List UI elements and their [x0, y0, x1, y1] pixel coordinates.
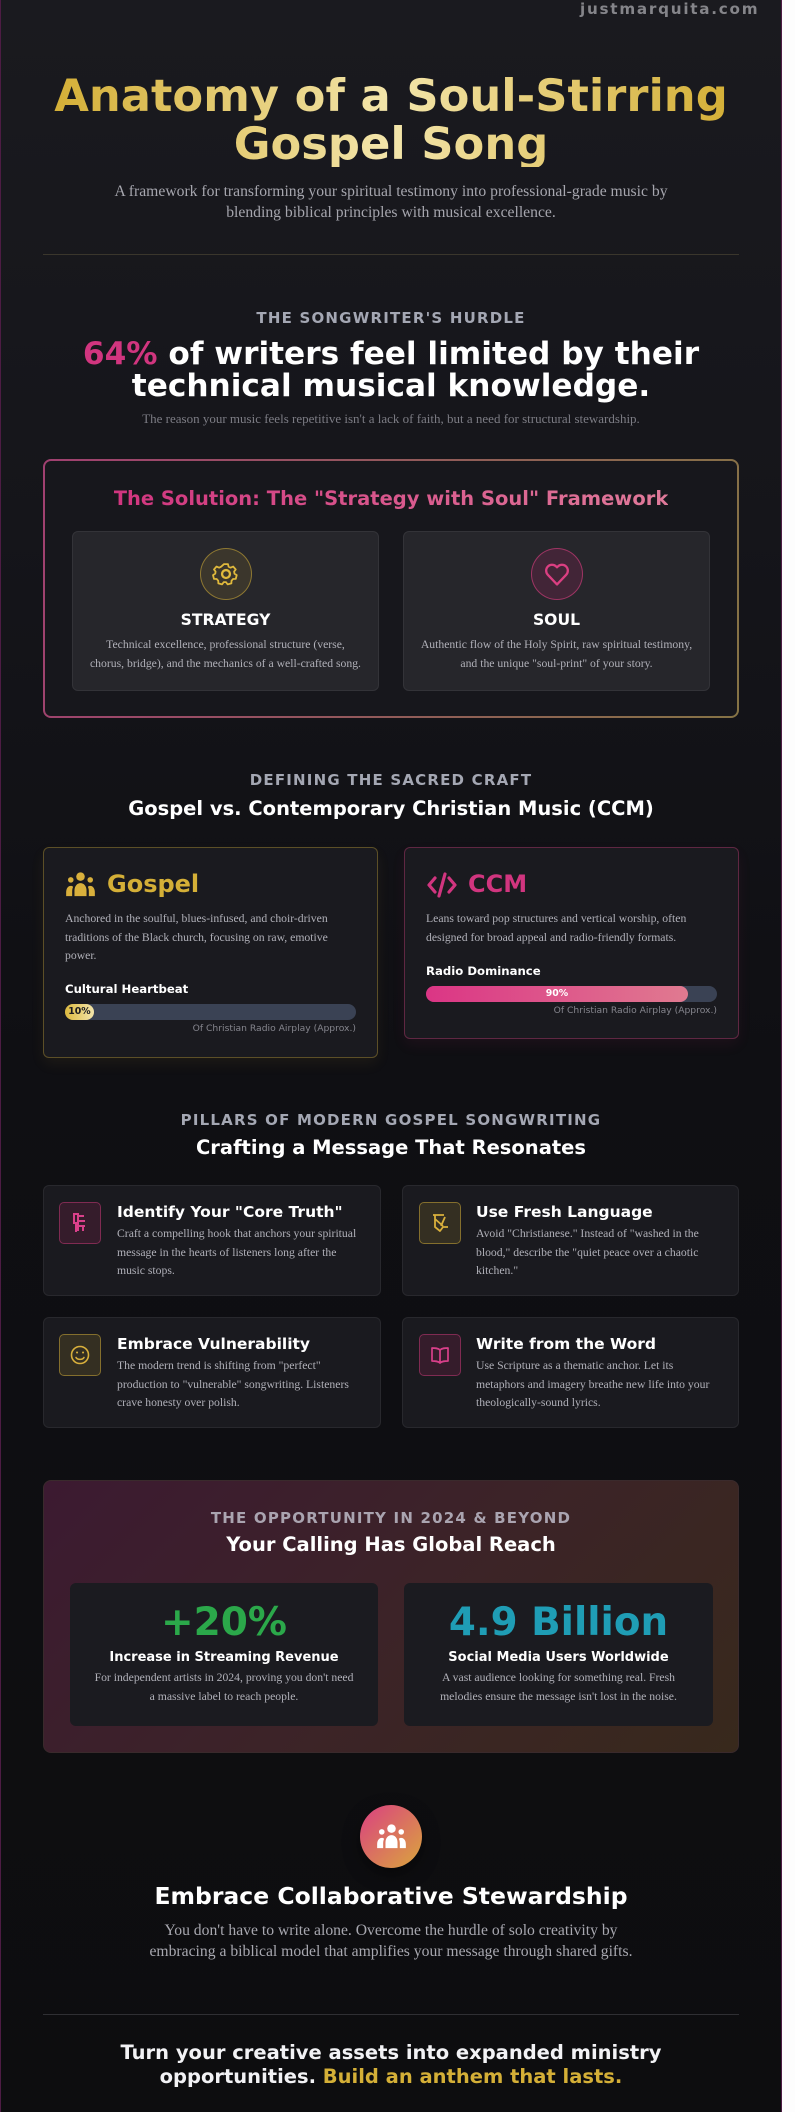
strategy text: Technical excellence, professional structure (verse,: [106, 638, 345, 651]
panel: solution framework: [43, 459, 739, 718]
core truth text: Craft a compelling hook that anchors your spiritual: [117, 1227, 356, 1240]
headline statistic: [83, 336, 700, 404]
fresh language text: [476, 1227, 699, 1277]
stat text: [440, 1671, 677, 1702]
soul text: [421, 638, 692, 670]
bar caption: Of Christian Radio Airplay (Approx.): [193, 1023, 356, 1034]
bar track: [426, 986, 717, 1002]
icon: code: [427, 872, 457, 898]
subtitle: blending biblical principles with musical excellence.: [226, 204, 556, 221]
core truth text: music stops.: [117, 1264, 175, 1277]
panel: gospel: [43, 847, 378, 1058]
gospel text: traditions of the Black church, focusing on raw, emotive: [65, 930, 328, 944]
closing statement: [120, 2041, 662, 2088]
icon: collaboration: [360, 1805, 422, 1868]
title: Gospel Song: [234, 116, 548, 170]
write from the word text: [476, 1359, 710, 1409]
core truth heading: Identify Your "Core Truth": [117, 1203, 343, 1221]
section heading: crafting a message: Crafting a Message That Resonates: [196, 1136, 586, 1159]
bar: cultural heartbeat: [65, 982, 356, 1034]
stat value: +20%: [161, 1600, 287, 1645]
hurdle note: The reason your music feels repetitive isn't a lack of faith, but a need for structural stewardship.: [142, 411, 640, 426]
write from the word heading: Write from the Word: [476, 1335, 656, 1353]
vulnerability text: [117, 1359, 349, 1409]
soul text: Authentic flow of the Holy Spirit, raw spiritual testimony,: [421, 638, 692, 651]
stat card: social media users: [404, 1583, 713, 1726]
stat label: Social Media Users Worldwide: [448, 1650, 669, 1665]
stat text: melodies ensure the message isn't lost in the noise.: [440, 1690, 677, 1702]
stat text: [95, 1671, 354, 1702]
bar label: Cultural Heartbeat: [65, 982, 188, 996]
pillar card: vulnerability: [43, 1317, 381, 1428]
core truth text: message in the hearts of listeners long after the: [117, 1246, 336, 1258]
closing statement: opportunities. Build an anthem that lasts.: [160, 2064, 622, 2088]
bar fill 10%: 10%: [68, 1006, 91, 1017]
bar: radio dominance: [426, 964, 717, 1016]
vulnerability text: crave honesty over polish.: [117, 1396, 240, 1409]
pillar card: write from the word: [402, 1317, 739, 1428]
panel: ccm: [404, 847, 739, 1039]
heading: collaborative stewardship: Embrace Collaborative Stewardship: [154, 1882, 628, 1910]
fresh language text: Avoid "Christianese." Instead of "washed in the: [476, 1227, 699, 1240]
fresh language heading: Use Fresh Language: [476, 1203, 653, 1221]
collaboration text: You don't have to write alone. Overcome the hurdle of solo creativity by: [164, 1922, 617, 1939]
fresh language text: kitchen.": [476, 1264, 518, 1277]
watermark: justmarquita.com: [580, 0, 759, 18]
subtitle: [114, 183, 668, 221]
stat text: For independent artists in 2024, proving you don't need: [95, 1671, 353, 1684]
ccm text: Leans toward pop structures and vertical worship, often: [426, 912, 686, 925]
title: Anatomy of a Soul-Stirring: [54, 69, 728, 122]
collaboration text: embracing a biblical model that amplifies your message through shared gifts.: [149, 1943, 633, 1960]
pillar card: fresh language: [402, 1185, 739, 1296]
solution heading: The Solution: The "Strategy with Soul" Framework: [114, 487, 668, 510]
section label: pillars: PILLARS OF MODERN GOSPEL SONGWRITING: [181, 1111, 601, 1129]
opportunity heading: Your Calling Has Global Reach: [226, 1533, 556, 1556]
section label: songwriter's hurdle: THE SONGWRITER'S HURDLE: [256, 309, 526, 327]
subtitle: A framework for transforming your spiritual testimony into professional-grade music by: [114, 183, 668, 200]
vulnerability heading: Embrace Vulnerability: [117, 1335, 310, 1353]
stat text: a massive label to reach people.: [150, 1690, 298, 1702]
stat card: streaming revenue: [70, 1583, 378, 1726]
bar label: Radio Dominance: [426, 964, 541, 978]
pillar card: core truth: [43, 1185, 381, 1296]
vulnerability text: The modern trend is shifting from "perfect": [117, 1359, 321, 1372]
strategy text: chorus, bridge), and the mechanics of a well-crafted song.: [90, 656, 361, 670]
bar fill 90%: 90%: [546, 988, 568, 999]
stat value: 4.9 Billion: [449, 1600, 668, 1645]
stat text: A vast audience looking for something real. Fresh: [442, 1671, 675, 1684]
icon: language: [419, 1202, 461, 1244]
title: [54, 69, 728, 170]
icon: people: [66, 872, 95, 896]
card: soul: [403, 531, 710, 691]
section heading: gospel vs ccm: Gospel vs. Contemporary Christian Music (CCM): [128, 797, 654, 820]
soul text: and the unique "soul-print" of your story.: [460, 656, 653, 670]
strategy heading: STRATEGY: [181, 611, 270, 629]
vulnerability text: production to "vulnerable" songwriting. Listeners: [117, 1378, 349, 1390]
opportunity label: THE OPPORTUNITY IN 2024 & BEYOND: [211, 1509, 571, 1527]
icon: heart: [531, 548, 583, 600]
gospel text: power.: [65, 949, 96, 962]
gospel text: [65, 912, 328, 962]
ccm text: designed for broad appeal and radio-friendly formats.: [426, 930, 676, 944]
bar fill 10%: [65, 1004, 94, 1020]
gospel heading: Gospel: [107, 870, 199, 898]
icon: chair: [59, 1202, 101, 1244]
card: strategy: [72, 531, 379, 691]
fresh language text: blood," describe the "quiet peace over a chaotic: [476, 1246, 698, 1258]
write from the word text: metaphors and imagery breathe new life into your: [476, 1378, 709, 1390]
bar track: [65, 1004, 356, 1020]
bar fill 90%: [426, 986, 688, 1002]
stat label: Increase in Streaming Revenue: [109, 1650, 339, 1665]
write from the word text: Use Scripture as a thematic anchor. Let its: [476, 1359, 673, 1372]
section label: sacred craft: DEFINING THE SACRED CRAFT: [250, 771, 532, 789]
icon: gear: [200, 548, 252, 600]
panel: opportunity: [43, 1480, 739, 1753]
ccm heading: CCM: [468, 870, 527, 898]
icon: smile: [59, 1334, 101, 1376]
bar caption: Of Christian Radio Airplay (Approx.): [554, 1005, 717, 1016]
icon: book: [419, 1334, 461, 1376]
headline statistic: 64% of writers feel limited by their: [83, 336, 699, 372]
collaboration text: [149, 1922, 633, 1960]
ccm text: [426, 912, 686, 944]
gospel text: Anchored in the soulful, blues-infused, and choir-driven: [65, 912, 328, 925]
headline statistic: technical musical knowledge.: [132, 368, 650, 404]
soul heading: SOUL: [533, 611, 580, 629]
core truth text: [117, 1227, 356, 1277]
strategy text: [90, 638, 361, 670]
write from the word text: theologically-sound lyrics.: [476, 1396, 601, 1409]
closing statement: Turn your creative assets into expanded ministry: [121, 2041, 661, 2064]
